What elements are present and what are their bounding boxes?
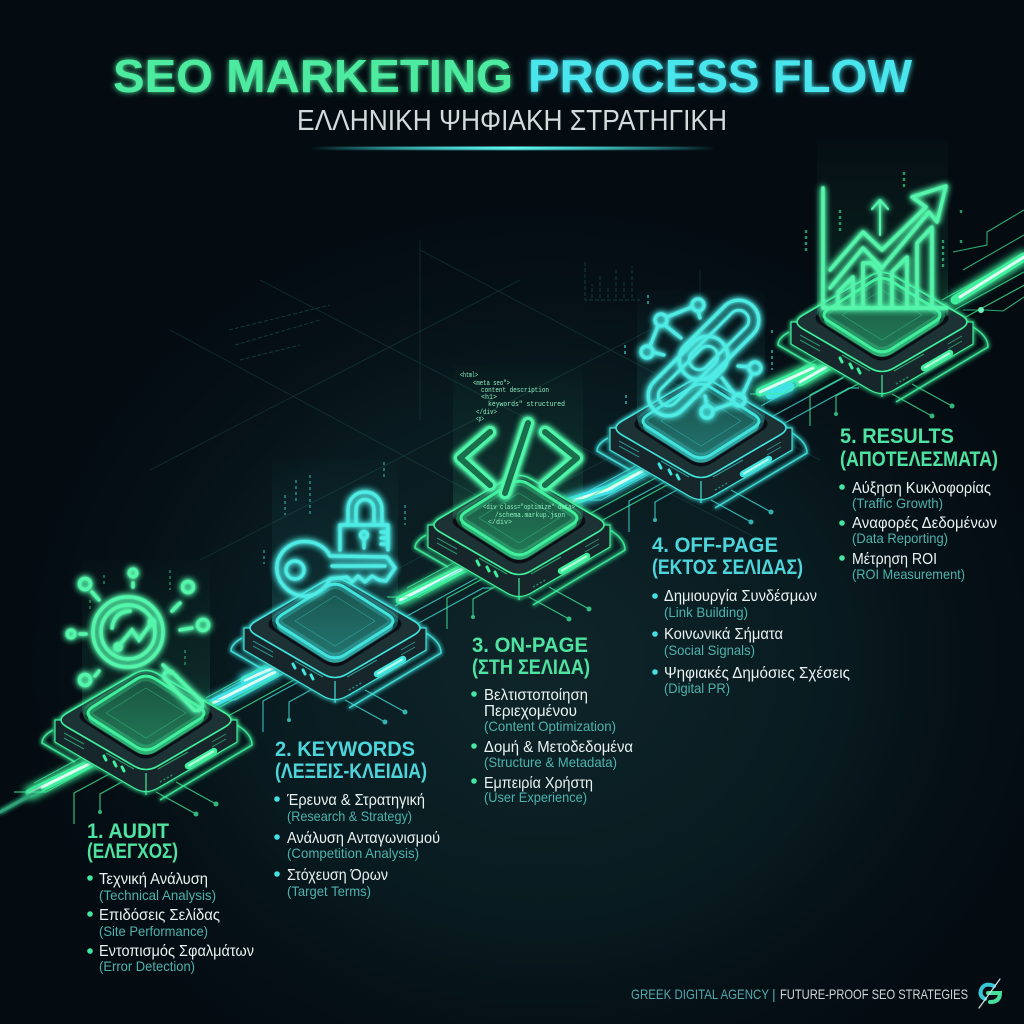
list items: (Error Detection) [99, 958, 195, 974]
heading: 4. OFF-PAGE [652, 534, 778, 557]
list items: Δομή & Μετοδεδομένα [484, 739, 633, 756]
bullets [471, 691, 477, 784]
list items [99, 871, 254, 974]
hologram panel 1 [82, 560, 210, 750]
icon: magnifier [67, 569, 208, 711]
tube glow [460, 423, 577, 493]
rain 4 [625, 295, 772, 405]
list items: (Competition Analysis) [287, 845, 419, 861]
rain 2 [264, 462, 405, 564]
list items: Έρευνα & Στρατηγική [286, 792, 425, 809]
list items: (Technical Analysis) [99, 887, 216, 903]
heading: 1. AUDIT [87, 820, 169, 843]
list items: Εμπειρία Χρήστη [484, 775, 593, 792]
code lines: /schema.markup.json [495, 512, 565, 520]
list items: Εντοπισμός Σφαλμάτων [99, 943, 254, 960]
step 2: keywords [231, 460, 441, 708]
code lines [460, 372, 575, 527]
list items [664, 588, 850, 696]
heading: 2. KEYWORDS [275, 738, 415, 761]
beam lead-in left [0, 790, 40, 812]
flow beams [0, 257, 1024, 812]
rain 1 [90, 570, 185, 666]
code lines: keywords" structured [488, 401, 565, 409]
list items: (Structure & Metadata) [484, 754, 617, 770]
icon: key and padlock [277, 492, 395, 596]
list items: (Content Optimization) [484, 718, 616, 734]
list items: Ψηφιακές Δημόσιες Σχέσεις [664, 665, 850, 682]
hologram panel 3 [453, 365, 583, 555]
beam core [30, 257, 1024, 793]
list items: Αύξηση Κυκλοφορίας [852, 480, 991, 497]
list items: Επιδόσεις Σελίδας [99, 907, 220, 924]
platform 3 [415, 476, 625, 605]
bullets [652, 593, 658, 675]
text block 3: on-page [471, 634, 633, 805]
list items: (Link Building) [664, 604, 748, 620]
list items: (ROI Measurement) [852, 566, 965, 582]
subheading: (ΛΕΞΕΙΣ-ΚΛΕΙΔΙΑ) [275, 760, 427, 783]
text block 2: keywords [274, 738, 440, 899]
subtitle: ΕΛΛΗΝΙΚΗ ΨΗΦΙΑΚΗ ΣΤΡΑΤΗΓΙΚΗ [297, 105, 727, 137]
list items [484, 687, 633, 805]
subheading: (ΕΚΤΟΣ ΣΕΛΙΔΑΣ) [652, 556, 803, 579]
list items [852, 480, 997, 582]
footer separator: | [772, 986, 776, 1002]
list items: Μέτρηση ROI [852, 551, 937, 568]
list items: Ανάλυση Ανταγωνισμού [287, 830, 440, 847]
circuit traces [14, 210, 1024, 824]
platform 1 [42, 670, 252, 800]
list items: Τεχνική Ανάλυση [99, 871, 208, 888]
step 5: results [778, 140, 988, 402]
platform 2 [231, 578, 441, 708]
list items: Στόχευση Όρων [287, 867, 388, 884]
step 1: audit [42, 560, 252, 800]
code lines: <meta seo"> [473, 380, 510, 388]
code lines: </div> [488, 519, 512, 527]
title: cyan part: PROCESS FLOW [528, 50, 913, 102]
code lines: </div> [476, 409, 497, 417]
text block 1: audit [87, 820, 254, 974]
footer [631, 979, 1000, 1008]
list items: (Data Reporting) [852, 530, 948, 546]
list items: (Social Signals) [664, 642, 755, 658]
text block 5: results [839, 425, 998, 582]
list items: Δημιουργία Συνδέσμων [664, 588, 817, 605]
step 3: on-page [415, 365, 625, 605]
bullets [839, 484, 845, 561]
list items: (User Experience) [484, 789, 587, 805]
list items [286, 792, 440, 899]
heading: 5. RESULTS [840, 425, 954, 448]
tube core [460, 423, 577, 493]
footer tagline: FUTURE-PROOF SEO STRATEGIES [780, 986, 968, 1002]
footer agency name: GREEK DIGITAL AGENCY [631, 986, 770, 1002]
code lines: <html> [460, 372, 478, 380]
bullets [87, 875, 93, 954]
icon: agency logo [979, 979, 1000, 1008]
hologram panel 5 [817, 140, 948, 352]
code lines: content description [481, 387, 549, 395]
list items: Βελτιστοποίηση [484, 687, 588, 704]
beam glow green [30, 257, 1024, 793]
title: green part: SEO MARKETING [113, 50, 513, 102]
hologram panel 2 [272, 460, 398, 658]
platform 5 [778, 272, 988, 402]
list items: (Digital PR) [664, 680, 730, 696]
subheading: (ΑΠΟΤΕΛΕΣΜΑΤΑ) [840, 448, 998, 471]
list items: (Target Terms) [287, 883, 371, 899]
icon: growth chart [823, 186, 947, 308]
hologram panel 4 [637, 290, 765, 458]
list items: (Site Performance) [99, 923, 208, 939]
list items: Αναφορές Δεδομένων [852, 515, 997, 532]
rain 5 [806, 172, 961, 270]
icon: chain link and nodes [640, 292, 767, 424]
platform 4 [597, 378, 807, 508]
beam glow cyan [213, 387, 790, 703]
step 4: off-page [597, 290, 807, 508]
text block 4: off-page [652, 534, 850, 696]
list items: Κοινωνικά Σήματα [664, 626, 783, 643]
subheading: (ΕΛΕΓΧΟΣ) [87, 840, 178, 863]
icon: code brackets [460, 423, 577, 493]
list items: (Research & Strategy) [287, 808, 412, 824]
title underline [310, 147, 715, 150]
code lines: <p> [476, 416, 484, 424]
code lines: <h1> [481, 394, 497, 402]
heading: 3. ON-PAGE [472, 634, 588, 657]
subheading: (ΣΤΗ ΣΕΛΙΔΑ) [472, 656, 590, 679]
bullets [274, 796, 280, 877]
list items: (Traffic Growth) [852, 495, 943, 511]
title [113, 50, 913, 102]
code lines: <div class="optimize" data> [483, 504, 575, 512]
list items: Περιεχομένου [484, 703, 577, 720]
